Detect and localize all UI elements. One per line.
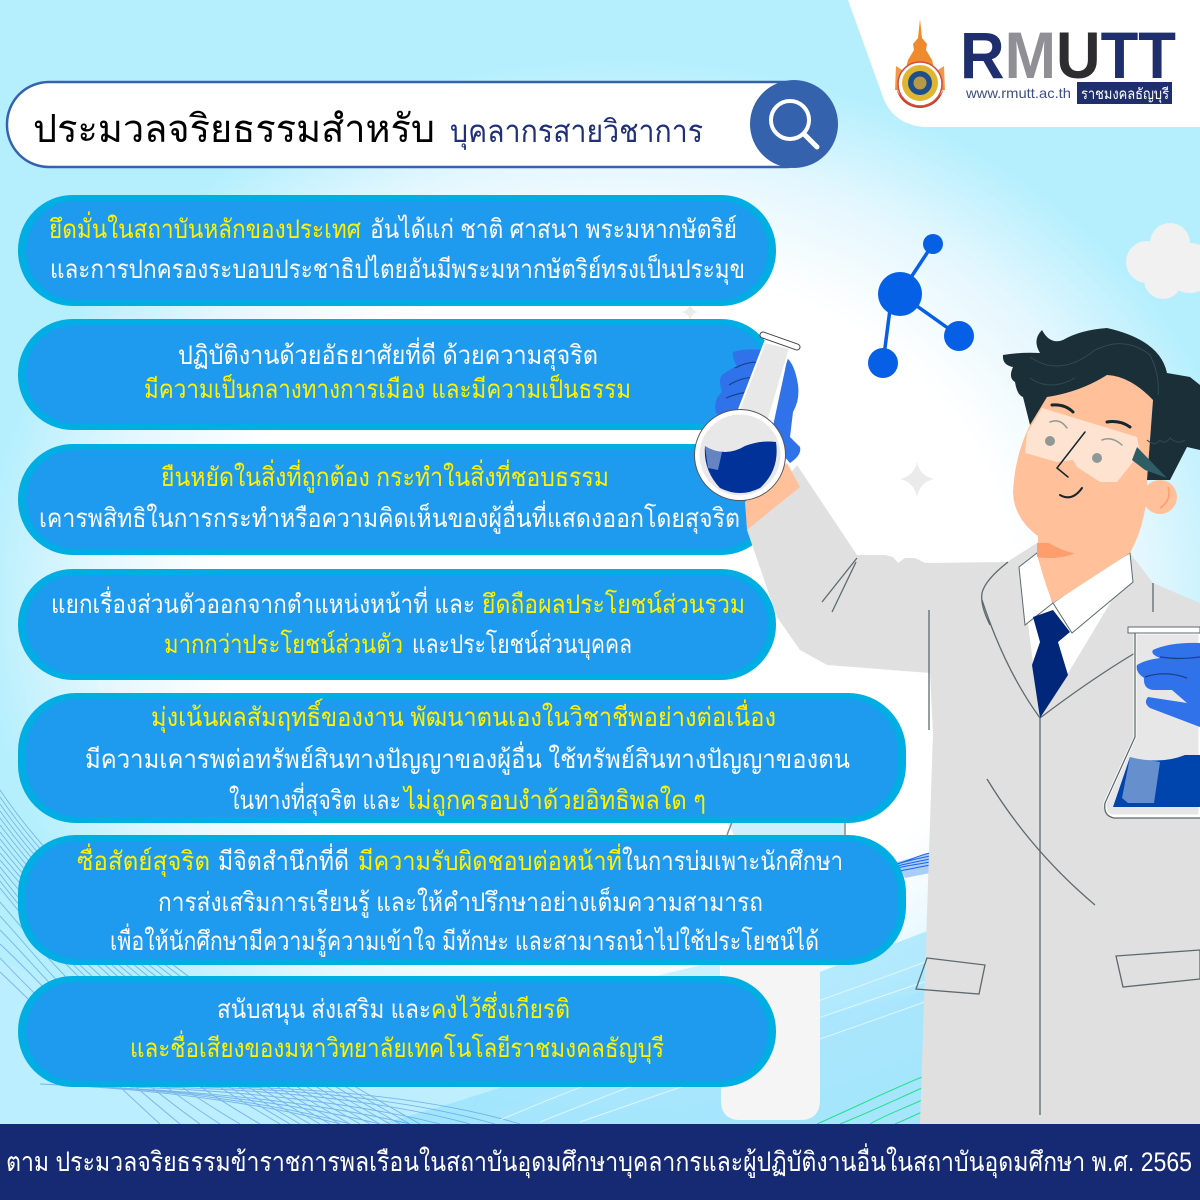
card 4	[18, 569, 776, 680]
bottle in the background	[721, 820, 845, 1120]
card 7: สนับสนุน ส่งเสริม และ	[217, 994, 431, 1025]
logo: university emblem	[895, 19, 945, 108]
card 6: มีความรับผิดชอบต่อหน้าที่	[358, 843, 622, 876]
safety goggles	[1025, 408, 1140, 482]
card 7: คงไว้ซึ่งเกียรติ	[431, 991, 570, 1024]
logo: RMUTT wordmark: RMUTT	[960, 18, 1176, 92]
card 5	[18, 693, 906, 823]
card 3: ยืนหยัดในสิ่งที่ถูกต้อง กระทำในสิ่งที่ชอบธรรม	[161, 459, 609, 493]
sparkle small	[681, 303, 699, 321]
card 5: ไม่ถูกครอบงำด้วยอิทธิพลใด ๆ	[402, 785, 706, 816]
card 4: มากกว่าประโยชน์ส่วนตัว	[164, 629, 403, 659]
card 6: ซื่อสัตย์สุจริต	[77, 843, 210, 877]
logo: campus name: ราชมงคลธัญบุรี	[1081, 86, 1169, 104]
logo panel	[848, 0, 1200, 127]
subtitle text: บุคลากรสายวิชาการ	[450, 114, 703, 151]
neck and face	[1013, 375, 1177, 603]
necktie	[1032, 610, 1070, 718]
facial features	[1045, 405, 1130, 497]
card 6: เพื่อให้นักศึกษามีความรู้ความเข้าใจ มีทักษะ และสามารถนำไปใช้ประโยชน์ได้	[110, 923, 819, 957]
card 1: ยึดมั่นในสถาบันหลักของประเทศ	[49, 211, 361, 244]
conical flask	[1105, 627, 1200, 818]
card 5: มุ่งเน้นผลสัมฤทธิ์ของงาน พัฒนาตนเองในวิชาชีพอย่างต่อเนื่อง	[151, 698, 776, 733]
card 4: ยึดถือผลประโยชน์ส่วนรวม	[482, 589, 745, 619]
logo: website: www.rmutt.ac.th	[965, 85, 1071, 101]
card 1	[18, 195, 776, 306]
scientist illustration	[694, 328, 1200, 1124]
card 1: และการปกครองระบอบประชาธิปไตยอันมีพระมหากษัตริย์ทรงเป็นประมุข	[50, 253, 745, 285]
card 5: มีความเคารพต่อทรัพย์สินทางปัญญาของผู้อื่น ใช้ทรัพย์สินทางปัญญาของตน	[85, 741, 850, 775]
goggle strap	[1132, 447, 1167, 478]
coat lines and pockets	[822, 558, 1200, 1115]
cloud	[1126, 223, 1200, 299]
card 2	[18, 319, 776, 430]
shirt and collar	[1019, 553, 1133, 718]
card 6: ในการบ่มเพาะนักศึกษา	[622, 846, 843, 876]
round flask	[694, 335, 797, 500]
card 7: และชื่อเสียงของมหาวิทยาลัยเทคโนโลยีราชมงคลธัญบุรี	[130, 1030, 664, 1064]
molecule	[868, 234, 974, 378]
hair	[1003, 328, 1200, 480]
icon: magnifier	[750, 80, 838, 168]
card 5: ในทางที่สุจริต และ	[229, 782, 401, 816]
footer bar	[0, 1124, 1200, 1200]
card 6	[18, 835, 906, 965]
card 2: ปฏิบัติงานด้วยอัธยาศัยที่ดี ด้วยความสุจริต	[178, 337, 598, 371]
title text: ประมวลจริยธรรมสำหรับ	[33, 108, 435, 151]
card 4: แยกเรื่องส่วนตัวออกจากตำแหน่งหน้าที่ และ	[51, 586, 475, 619]
card 4: และประโยชน์ส่วนบุคคล	[412, 629, 632, 660]
logo: campus name	[1077, 82, 1172, 104]
background wave lines	[0, 790, 1200, 1124]
card 7	[18, 976, 776, 1087]
sparkle	[900, 462, 934, 497]
card 6: การส่งเสริมการเรียนรู้ และให้คำปรึกษาอย่างเต็มความสามารถ	[158, 886, 763, 918]
coat	[747, 465, 1200, 1124]
card 2: มีความเป็นกลางทางการเมือง และมีความเป็นธรรม	[144, 373, 631, 404]
left hand and glove	[715, 349, 800, 530]
card 1: อันได้แก่ ชาติ ศาสนา พระมหากษัตริย์	[370, 214, 737, 244]
title search bar	[7, 80, 838, 168]
card 3: เคารพสิทธิในการกระทำหรือความคิดเห็นของผู้อื่นที่แสดงออกโดยสุจริต	[39, 500, 740, 534]
card 3	[18, 444, 776, 555]
card 6: มีจิตสำนึกที่ดี	[218, 843, 349, 876]
